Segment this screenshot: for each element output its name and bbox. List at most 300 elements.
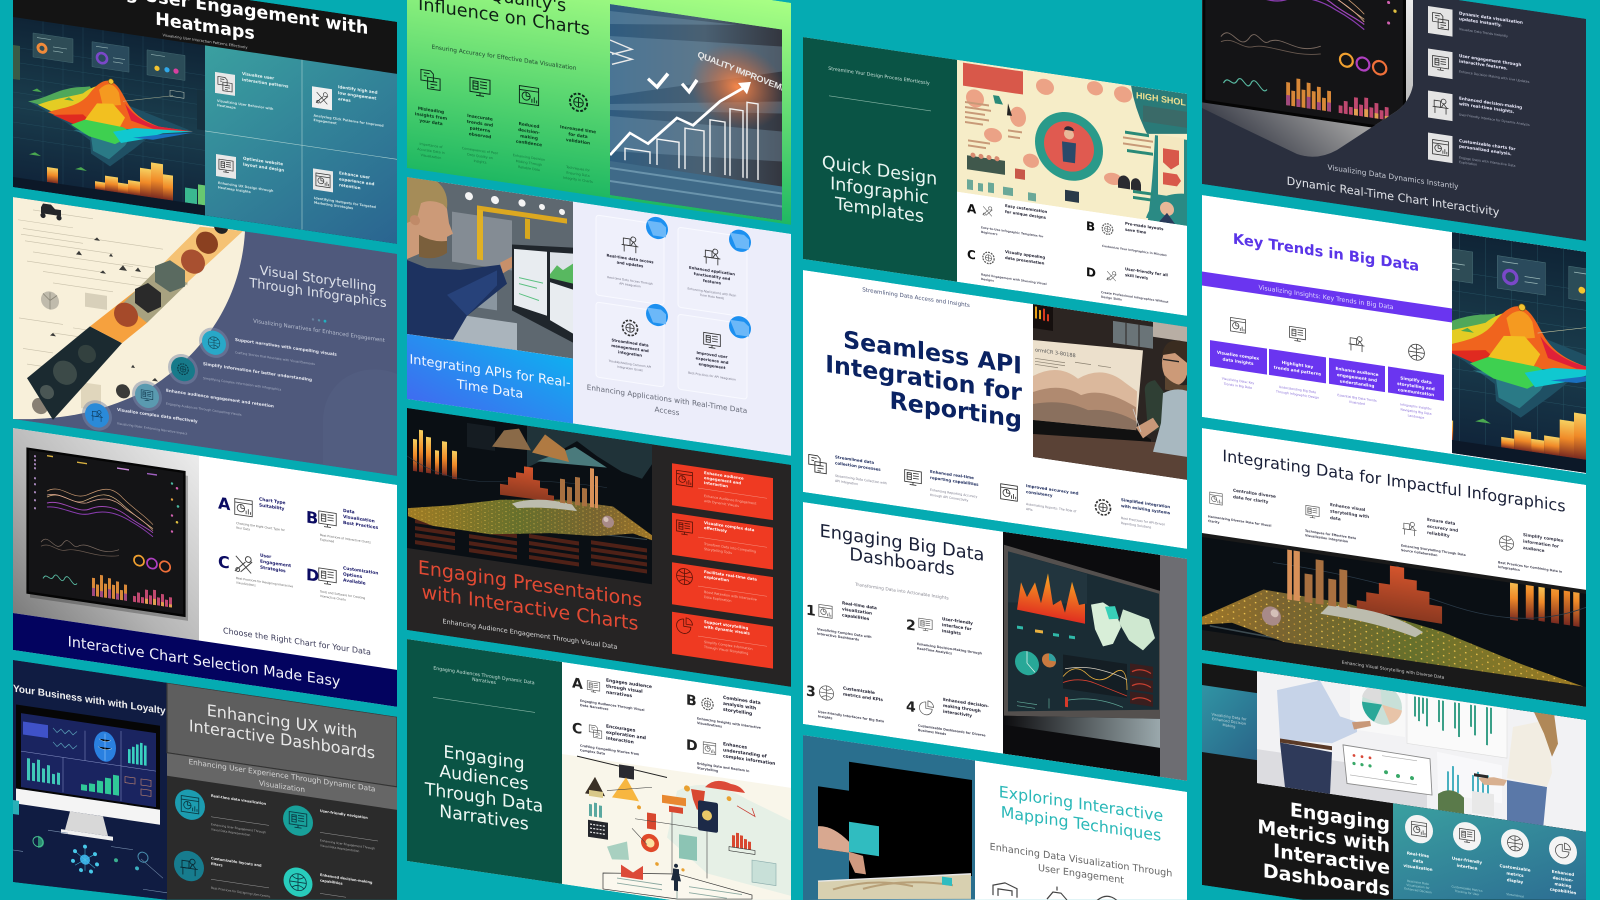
finding 3: Heatmap Insights [218,185,251,194]
consequence 3: Enhancing Decision [513,153,545,162]
footer caption: Enhancing Visual Storytelling with Diverse Data [1342,660,1445,681]
consequence 1: Accurate Data in [417,147,445,155]
capability 2 [1428,48,1530,91]
item 4: interactivity [943,709,972,718]
option B: Best Practices [343,520,379,531]
integration benefit 4: Simplified integration [1121,497,1170,509]
integration point 2: Visualization Integration [1305,533,1348,544]
purple subtitle band [1202,272,1452,322]
item 3: metrics and KPIs [843,691,883,702]
integration benefit 4: with existing systems [1121,503,1171,515]
option C: Strategies [260,565,286,574]
feature 4: capabilities [320,878,343,886]
feature 3 [174,849,271,899]
template feature B [1086,215,1167,257]
integration point 3: Enhancing Storytelling Through Data [1401,543,1466,557]
point C: Crafting Compelling Stories from [580,744,640,756]
title: Key Trends in Big Data [1233,231,1419,275]
item 1: 1 [806,603,816,620]
option C: User [260,553,272,560]
mirrored terrain image [1202,473,1589,751]
consequence 4 [560,91,596,184]
navy footer band [13,613,397,707]
technique icons [993,877,1117,900]
capability 4: Engage Users with Interactive Data [1459,156,1516,168]
red card 4: Support storytelling [704,619,748,631]
heatmap image [11,17,205,215]
point B: B [686,692,697,710]
red card 4: Simplify Complex Information [704,640,753,651]
option C [218,553,293,588]
metric 4: making [1555,881,1572,889]
consequence 1: Visualization [421,153,441,160]
metric 3: Customizable [1499,863,1531,873]
caption: Choose the Right Chart for Your Data [223,626,371,657]
benefit card 2: Enhanced application [689,265,735,277]
consequence 1: insights from [415,111,448,122]
red card 3: Data Exploration [704,595,732,603]
metric 4 [1549,834,1577,895]
option B: Data [343,508,355,516]
benefit card 3 [596,295,668,388]
consequence 4: Ensuring Data [566,171,590,178]
integration point 1: Centralize diverse [1233,488,1276,499]
integration point 1 [1208,484,1276,533]
title: Seamless API [843,326,1022,380]
point B: Visualizations [697,721,722,729]
integration point 2: storytelling with [1330,508,1369,519]
capability 1: updates instantly. [1459,16,1502,27]
item 1: Interactive Dashboards [817,632,859,642]
point A: A [572,675,583,693]
template feature A: for unique designs [1005,209,1047,220]
consequence 4: Increased time [560,124,596,135]
benefit card 4: engagement [699,361,726,370]
integration benefit 1: Streamlined data [835,454,874,465]
terrain data image [407,408,652,584]
red card 1: interaction [704,480,728,489]
capability 1: Dynamic data visualization [1459,11,1523,25]
feature 2: Enhancing User Engagement Through [320,838,375,851]
narrative points: Enhance audience engagement and retention [166,388,274,409]
red card 3 [672,562,773,619]
trend 2: Highlight key [1282,360,1314,369]
title: Through Infographics [248,276,387,311]
trend 2 [1269,323,1326,401]
benefit card 2: features [703,278,722,286]
trend 3: understanding [1340,378,1374,388]
template feature A: A [967,201,977,217]
finding 3: Enhancing UX Design through [218,181,274,193]
consequence 1 [415,69,448,161]
option C: Visualizations [236,581,256,587]
item 2: Real-Time Analytics [917,646,952,656]
item 3: Insights [818,714,833,720]
point B: Combines data [723,695,761,706]
point A: through visual [606,683,643,695]
integration point 3: Source Collaboration [1401,548,1438,557]
green title panel: Streamline Your Design Process Effortlessly [828,66,930,87]
consequence 3: Reliable Data [518,165,540,172]
template feature D: Create Professional Infographics Without [1101,290,1169,304]
finding 4: Enhance user [339,170,371,180]
consequence 2: Data Quality on [467,152,493,160]
red card 2 [672,513,773,570]
slide: enhancing UX with dashboards [13,660,397,900]
retro infographic illustration: HIGH SHOL [1136,90,1186,108]
red card 3: Boost Retention with Interactive [704,590,757,602]
blue title block [407,334,573,424]
narrative points: Simplifying Complex Information with Infographics [203,376,282,392]
title: Dynamic Real-Time Chart Interactivity [1287,175,1500,219]
trend 4: Simplify data [1400,375,1432,385]
template feature A: Easy customization [1005,203,1047,214]
finding 3: Optimize website [243,156,283,166]
integration benefit 3: Improved accuracy and [1026,483,1079,496]
slide: data quality influence on charts [407,0,791,225]
feature 4: Enhanced decision-making [320,873,373,885]
consequence 4: validation [566,137,590,147]
slide: interactive chart selection [13,428,397,707]
metric 3: metrics [1506,871,1524,878]
option C: Engagement [260,559,291,569]
point A: Engaging Audiences Through Visual [580,699,645,712]
cream timeline illustration [13,197,245,420]
red card 1: Enhance audience [704,470,744,481]
trend 2: Through Infographic Design [1275,389,1319,400]
consequence 1: Importance of [420,142,443,149]
red card 1: with Dynamic Visuals [704,499,739,508]
item 4: Customizable Dashboards for Diverse [918,724,986,738]
integration benefit 2: through API Connectivity [930,493,969,502]
metric 1: Real-time Data [1407,879,1429,886]
purple subtitle band: Visualizing Insights: Key Trends in Big Data [1258,284,1394,311]
trend 4: storytelling and [1397,381,1435,391]
option A: Suitability [259,502,285,512]
capability 3: with real-time insights. [1459,101,1515,114]
slide: interactive mapping techniques [803,735,1187,900]
technician at monitor photo [403,176,573,359]
capability 3: User-Friendly Interface for Dynamic Analysis [1459,113,1530,127]
point D: complex information [723,753,775,767]
benefit card 1: Real-time Data Access Through [607,275,653,286]
consequence 3: confidence [516,139,542,148]
slide: integrating data for infographics [1202,428,1589,751]
point D: Enhances [723,741,747,751]
template feature C: C [967,247,976,263]
subtitle: Visualizing Data Dynamics Instantly [1328,163,1459,191]
teal label block: Visualizing Data for [1212,712,1247,722]
metric 2 [1451,820,1483,897]
trend 3 [1329,332,1385,409]
slide: engaging metrics dashboards [1202,658,1586,900]
analyst with laptop photo: ormICR 3-80188 [1035,347,1076,359]
finding 4: retention [339,182,361,190]
integration point 2: Enhance visual [1330,502,1366,512]
red card 2: Visualize complex data [704,520,755,532]
trend 3: engagement and [1337,372,1377,383]
gray header with title: Enhancing UX with [207,701,357,742]
trend 4: communication [1398,387,1434,397]
subtitle: Ensuring Accuracy for Effective Data Visualization [432,45,577,72]
feature 2: User-friendly navigation [320,809,368,820]
option B: Best Practices of Interactive Charts [320,533,371,545]
finding 1 [215,72,288,110]
green title panel: Quick Design [822,153,937,190]
blue title block: Time Data [456,377,523,402]
red card 1: Enhance Audience Engagement [704,494,757,506]
red card 2: Transform Data into Compelling [703,542,756,554]
integration benefit 2: Enhanced real-time [930,469,974,480]
consequence 4: Integrity in Charts [563,176,593,184]
option A: Choosing the Right Chart Type for [236,521,286,532]
title: Exploring Interactive [999,782,1163,825]
subtitle: User Engagement [1038,863,1124,887]
narrative points: Simplify information for better understanding [203,361,312,382]
benefit card 1: Real-time data access [607,253,654,265]
metric 4: decision- [1553,875,1574,883]
slide: big data dashboards [803,502,1187,781]
consequence 3: making [520,133,538,142]
dark footer band [1202,533,1586,707]
consequence 1: Misleading [418,106,444,115]
benefit card 2: Enhancing Applications with Real- [688,287,736,298]
integration benefit 1: Streamlining Data Collection with [835,474,887,485]
point B [686,689,762,734]
trend 4: Landscape [1408,413,1424,420]
feature 1: Enhancing User Engagement Through [211,822,266,834]
pager dots [312,318,326,323]
option A: Chart Type [259,496,286,506]
template feature B: Customize Your Infographics in Minutes [1102,244,1167,257]
integration point 3 [1401,513,1466,562]
consequence 2: observed [469,131,491,140]
column 2 of tilted slides [403,0,791,900]
item 4: making through [943,703,981,713]
point B: Enhancing Insights with Interactive [697,716,762,730]
benefit card 4: Improved user [696,350,728,359]
option B [307,508,378,544]
capability 2: User engagement through [1459,53,1521,67]
subtitle: Transforming Data into Actionable Insights [854,582,949,602]
metric 3: display [1507,877,1524,885]
consequence 2 [462,76,499,167]
trend 4: Navigating Big Data [1400,407,1432,416]
title: Metrics with [1257,815,1390,857]
item 4 [906,691,989,743]
integration point 4: Infographics [1498,565,1520,572]
red card 1 [672,463,773,520]
template feature A: Beginners [981,230,998,236]
slide: visual storytelling [13,189,397,476]
teal metrics panel [1393,803,1586,900]
wall-mounted dashboard image [13,428,199,641]
point C: exploration and [606,729,646,741]
item 1: Real-time data [842,600,877,610]
narrative points: Visualizing Data: Enhancing Narrative Impact [117,421,188,436]
red card 2: effectively [704,525,727,533]
finding 4: Marketing Strategies [314,201,353,210]
capability 4: personalized analysis. [1459,144,1512,156]
item 3: User-Friendly Interfaces for Big Data [818,710,884,723]
consequence 2: Consequences of Poor [462,146,499,156]
trend 4 [1388,340,1444,423]
consequence 3: Making Through [516,159,542,167]
item 3: Customizable [843,685,875,695]
blue title block: Integrating APIs for Real- [410,352,571,391]
consequence 4: for data [568,131,588,140]
trend 1: Visualizing Data: Key [1222,376,1254,385]
integration point 1: Clarity [1208,519,1219,525]
title: Visual Storytelling [260,264,376,296]
capability 3 [1428,90,1530,133]
green title panel [407,639,562,884]
item 2: User-friendly [942,616,973,626]
analyst with laptop photo [1033,304,1188,480]
integration point 3: reliability [1427,530,1450,538]
office presentation photo [1257,666,1586,836]
integration point 3: accuracy and [1427,523,1458,533]
point C: interaction [606,735,634,746]
title: with Interactive Charts [422,580,638,635]
title: Mapping Techniques [1001,802,1161,845]
red card 2: Storytelling Tools [704,547,732,555]
option C: Best Practices for Designing Interactive [236,576,293,588]
integration point 4: Simplify complex [1523,532,1564,543]
heatmap image [1392,223,1600,481]
red card 3: exploration [704,574,729,583]
benefit card 4 [678,307,751,400]
item 2: interface for [942,622,972,632]
integration point 4: audience [1523,545,1545,553]
title: Reporting [890,386,1022,434]
capability 4: Customizable charts for [1459,138,1516,152]
narrative points [82,328,336,435]
integration benefit 3: consistency [1026,489,1053,498]
rounded dashboard image [1202,0,1413,173]
integration benefit 2 [905,465,979,504]
point A [572,672,652,718]
finding 2: Analyzing Click Patterns for Improved [314,113,384,128]
option A: A [218,493,231,514]
template feature C: Designs [981,277,994,283]
integration benefit 3: Automating Reports: The Role of [1026,502,1077,514]
red card 4: Through Visual Storytelling [703,645,748,656]
finding 4 [313,168,376,210]
point D: Storytelling [697,766,719,773]
slide: integrating APIs [403,176,791,456]
option B: B [306,507,318,528]
red card 4: with dynamic visuals [704,624,751,636]
option D: D [306,565,319,586]
metric 2: Customizable Metrics [1451,884,1483,893]
title: Engaging Presentations [418,556,642,612]
capability 4: Exploration [1459,160,1477,167]
option B: Explained [320,537,334,544]
diagonal photo band [27,226,243,420]
slide: engaging presentations [407,408,791,687]
trend 2: Understanding Big Data [1279,385,1316,394]
item 2 [906,611,983,660]
item 2: 2 [906,617,916,635]
metric 1: data [1413,858,1423,864]
benefit card 3: Troubleshooting Common API [608,359,651,369]
title: Dashboards [1263,859,1390,900]
title: Heatmaps [155,10,255,44]
trend 2: trends and patterns [1274,365,1322,377]
finding 1: Visualizing User Behavior with [217,99,274,111]
item 1: capabilities [842,612,870,621]
integration benefit 3: APIs [1026,507,1033,512]
template feature D: skill levels [1125,272,1149,281]
integration point 1: data for clarity [1233,494,1269,504]
template feature B: save time [1125,227,1147,235]
feature 3: Customizable layouts and [211,856,262,868]
point C: Encourages [606,723,636,734]
integration point 3: Ensure data [1427,517,1456,526]
metric 2: interface [1457,863,1478,871]
integration benefit 1: API Integration [835,479,858,486]
green title panel: Engaging [443,742,525,774]
green title panel: Infographic [830,174,929,209]
integration benefit 2: Enhancing Reporting Accuracy [930,488,977,499]
retro infographic illustration [957,60,1187,226]
narrative points: Support narratives with compelling visuals [235,337,337,357]
feature 1: Real-time data visualization [211,794,267,806]
template feature B: B [1086,219,1095,234]
benefit card 4: Best Practices for API Integration [688,371,736,382]
green title panel: Narratives [439,802,529,835]
template feature D: Design Skills [1101,295,1122,302]
benefit card 3: Integration Issues [617,365,643,372]
finding 3 [216,154,284,194]
template feature B: Pre-made layouts [1125,221,1164,231]
point B: analysis with [723,701,756,712]
integration point 2: data [1330,515,1341,522]
consequence 1: your data [419,118,443,127]
green title panel: Narratives [472,677,496,686]
trend 3: Essential Big Data Trends [1337,393,1377,403]
integration point 4 [1498,528,1564,579]
point C [572,718,646,762]
red card 3: Facilitate real-time data [704,569,757,582]
finding 1: interaction patterns [242,77,289,89]
metric 2: User-friendly [1452,856,1482,865]
benefit card 1: and updates [617,260,644,269]
title: Dashboards [849,544,955,580]
consequence 2: Inaccurate [467,113,493,123]
feature 2 [283,806,378,852]
metric 1: Enhanced Decision [1404,886,1432,895]
point D: D [686,737,698,755]
point C: C [572,720,582,738]
integration point 2 [1305,498,1369,547]
template feature D: D [1086,265,1096,280]
item 3 [806,680,884,728]
point D [686,736,775,782]
option D: Interactive Charts [320,594,346,602]
red card 4 [672,612,773,669]
column 1 of tilted slides [11,0,397,900]
footer title: Interactive Chart Selection Made Easy [68,634,341,691]
stepped map photo panel [803,735,975,900]
benefit card 4: experience and [696,355,729,365]
caption: Access [655,405,680,417]
green title panel: Audiences [439,762,529,795]
column 4 of tilted slides [1202,0,1600,900]
template feature C: Visually appealing [1005,249,1045,260]
teal label block: Making [1223,723,1235,729]
